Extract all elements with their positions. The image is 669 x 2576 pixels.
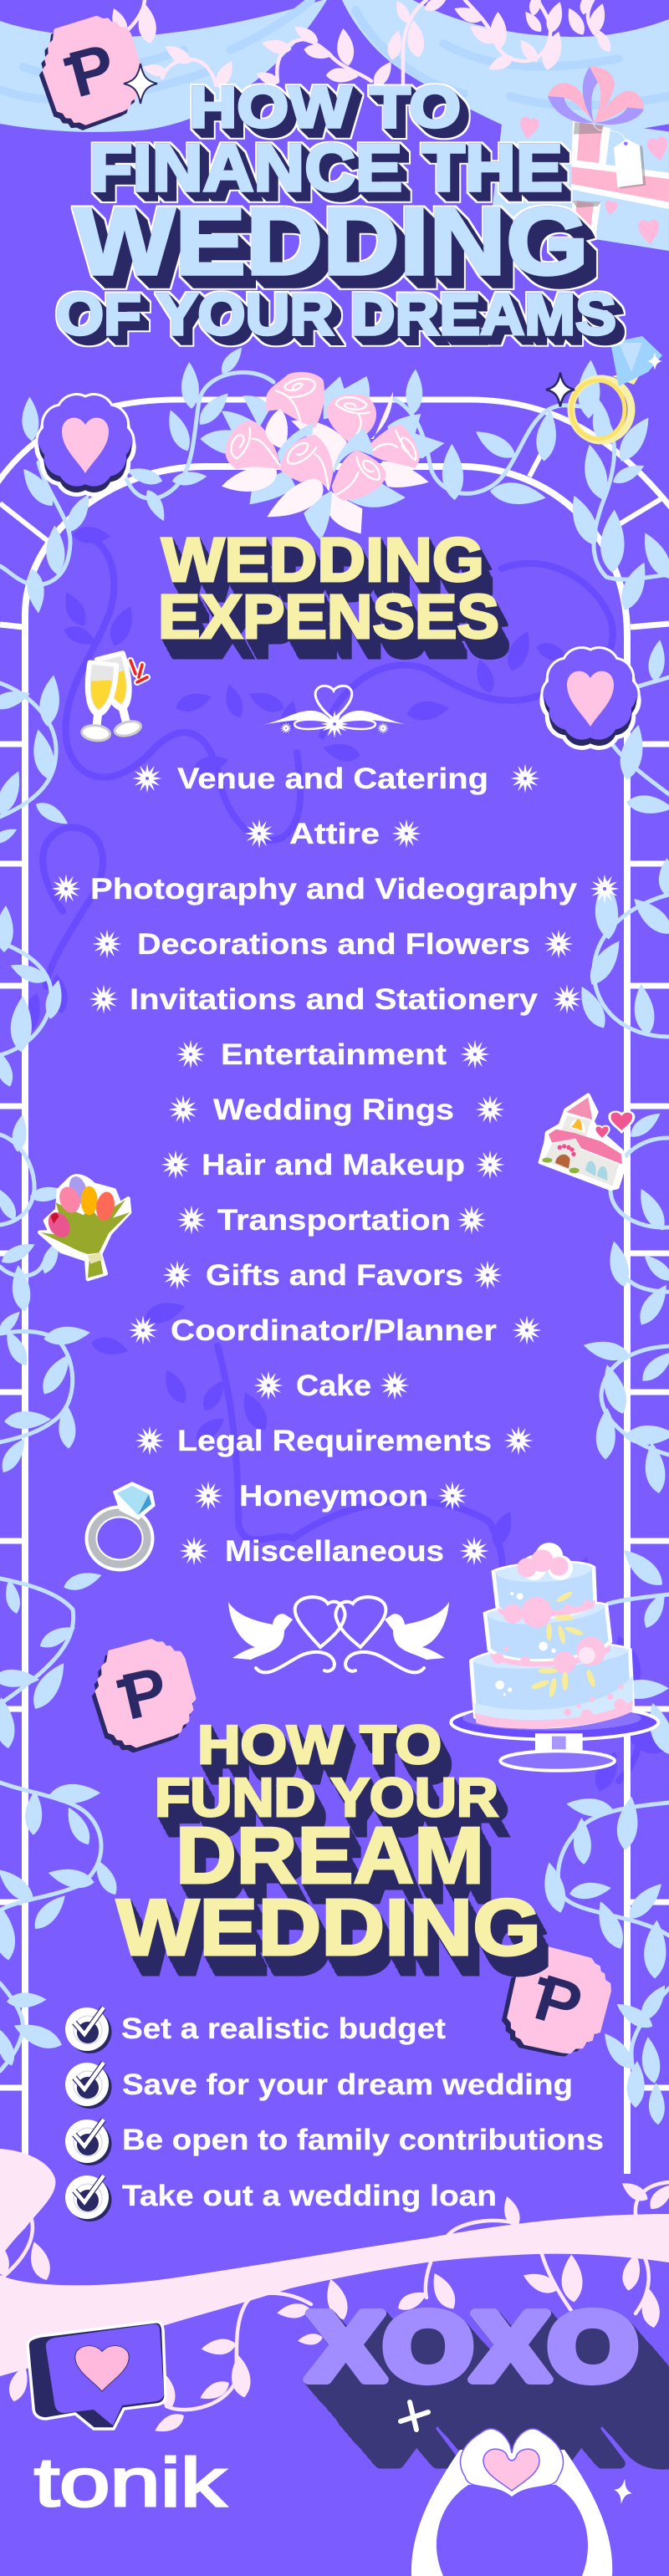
item: wedding rings xyxy=(169,1094,505,1126)
item: transportation xyxy=(177,1204,487,1237)
blue climbing vines xyxy=(0,344,669,2125)
title: FINANCE THE xyxy=(89,130,563,205)
item: coordinator/planner xyxy=(129,1314,542,1347)
item: entertainment xyxy=(176,1038,490,1071)
pink vines at top xyxy=(107,0,615,91)
badge: peso coin top left xyxy=(30,9,152,136)
item: invitations and stationery: Invitations and Stationery xyxy=(130,983,539,1016)
item: hair and makeup: Hair and Makeup xyxy=(202,1149,465,1181)
badge: peso coin left of funding title: P xyxy=(115,1652,174,1734)
checklist: ways to fund xyxy=(65,2007,604,2221)
item: honeymoon xyxy=(194,1480,467,1512)
item: cake: Cake xyxy=(296,1370,371,1402)
item: miscellaneous: Miscellaneous xyxy=(225,1535,444,1568)
heading: wedding expenses xyxy=(158,525,499,651)
item: wedding rings: Wedding Rings xyxy=(213,1094,454,1126)
icon: champagne glasses xyxy=(81,653,147,742)
item: cake xyxy=(254,1370,410,1402)
icon: scalloped heart badge left xyxy=(37,395,134,494)
check item: budget xyxy=(65,2007,446,2053)
check item: budget: Set a realistic budget xyxy=(121,2012,446,2045)
item: venue and catering: Venue and Catering xyxy=(177,763,488,795)
heading: how to fund your dream wedding: FUND YOUR xyxy=(155,1767,498,1828)
logo: tonik: tonik xyxy=(34,2445,227,2521)
item: miscellaneous xyxy=(179,1535,488,1568)
heading: how to fund your dream wedding: HOW TO xyxy=(197,1714,442,1775)
icon: three-tier wedding cake xyxy=(451,1543,658,1771)
heading: wedding expenses: EXPENSES xyxy=(158,582,499,651)
heading: how to fund your dream wedding: WEDDING xyxy=(116,1883,541,1972)
check item: save: Save for your dream wedding xyxy=(122,2068,573,2101)
icon: diamond ring top right xyxy=(571,336,662,441)
icon: chat bubble with heart xyxy=(28,2322,166,2429)
icon: silver diamond ring xyxy=(91,1484,153,1565)
check item: loan: Take out a wedding loan xyxy=(122,2180,497,2212)
icon: doves and linked hearts xyxy=(228,1597,449,1672)
item: entertainment: Entertainment xyxy=(221,1038,447,1071)
item: decorations and flowers: Decorations and Flowers xyxy=(137,928,530,961)
item: coordinator/planner: Coordinator/Planner xyxy=(171,1314,497,1347)
icon: rose bouquet xyxy=(200,372,445,540)
icon: sparkle on xoxo shadow xyxy=(401,2402,428,2430)
text: xoxo: XOXO xyxy=(308,2293,637,2400)
background vine watermark xyxy=(14,527,669,1794)
wedding arch lattice xyxy=(0,400,669,2174)
icon: church xyxy=(540,1095,634,1189)
item: photography and videography: Photography and Videography xyxy=(90,873,578,905)
icon: scalloped heart badge right xyxy=(542,648,639,747)
check item: loan xyxy=(65,2176,497,2221)
icon: tulip bouquet xyxy=(39,1175,130,1279)
check item: family xyxy=(65,2119,604,2165)
title: HOW TO xyxy=(189,74,461,140)
text block: expense list xyxy=(52,763,619,1568)
item: honeymoon: Honeymoon xyxy=(239,1480,428,1512)
badge: peso coin right of funding title: P xyxy=(527,1960,590,2043)
badge: peso coin right of funding title xyxy=(494,1939,619,2068)
heading: wedding expenses: WEDDING xyxy=(161,525,484,594)
item: legal requirements: Legal Requirements xyxy=(177,1425,492,1457)
title: OF YOUR DREAMS xyxy=(56,282,616,347)
bottom pink vines xyxy=(0,2179,669,2438)
icon: sparkle xyxy=(124,64,157,104)
icon: gift box xyxy=(491,67,669,251)
icon: ring with heart hands xyxy=(411,2429,612,2576)
heading: how to fund your dream wedding: DREAM xyxy=(176,1811,484,1900)
icon: gift tag xyxy=(593,123,646,189)
item: gifts and favors: Gifts and Favors xyxy=(206,1259,463,1292)
badge: peso coin left of funding title xyxy=(84,1634,203,1757)
top drapes xyxy=(0,0,669,132)
item: attire: Attire xyxy=(289,818,380,850)
item: hair and makeup xyxy=(161,1149,505,1181)
check item: save xyxy=(65,2063,573,2109)
item: gifts and favors xyxy=(162,1259,502,1292)
ornament: heart flourish xyxy=(256,686,414,738)
icon: small sparkle right xyxy=(612,2477,634,2507)
icon: sparkle near ring xyxy=(546,373,575,406)
item: attire xyxy=(244,818,421,850)
badge: peso coin top left: P xyxy=(61,29,123,111)
item: venue and catering xyxy=(132,763,540,795)
bottom pale pink branches xyxy=(0,2149,669,2376)
item: transportation: Transportation xyxy=(217,1204,451,1237)
title xyxy=(56,74,616,347)
check item: family: Be open to family contributions xyxy=(122,2124,604,2156)
heading: how to fund your dream wedding xyxy=(116,1714,541,1972)
title: WEDDING xyxy=(74,189,589,295)
